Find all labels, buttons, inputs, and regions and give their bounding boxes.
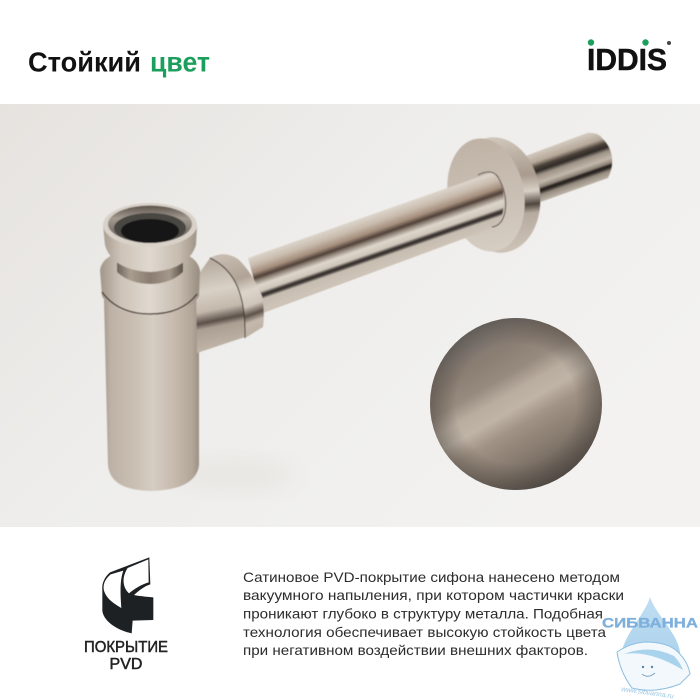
soft shadow under siphon [175,459,295,491]
logo: IDDIS: IDDIS [587,42,667,77]
description text [243,569,624,658]
coupling seam [210,258,245,338]
bathtub [617,642,690,690]
elbow [196,258,245,353]
title [28,46,210,78]
top cap [103,225,197,272]
label: PVD coating: PVD [110,656,142,673]
description text: при негативном воздействии внешних факторов. [243,642,588,658]
collar seam [102,292,197,314]
title: Стойкий [28,46,141,78]
wall flange [439,132,548,258]
right pipe section [520,133,612,204]
collar [100,254,200,314]
cap opening [103,203,197,247]
neck [117,262,183,284]
panel: product photo [0,104,700,527]
watermark url: www.sibvanna.ru [621,686,674,700]
coating sample sphere [430,318,602,490]
description text: технология обеспечивает высокую стойкость цвета [243,624,606,640]
pipe ring at flange [478,172,506,227]
description text: вакуумного напыления, при котором частички краски [243,587,624,603]
watermark: Sibvanna [602,597,698,700]
siphon [100,132,612,491]
description text: проникают глубоко в структуру металла. Подобная [243,606,603,622]
icon: PVD coating [102,557,153,633]
watermark name: СИБВАННА [602,616,698,630]
vertical body [104,300,199,491]
label: PVD coating [84,639,168,673]
coupling nut [210,254,264,338]
long horizontal pipe [248,173,504,313]
water drop [621,597,680,690]
description text: Сатиновое PVD-покрытие сифона нанесено методом [243,569,620,585]
title: цвет [150,46,210,78]
label: PVD coating: ПОКРЫТИЕ [84,639,168,656]
